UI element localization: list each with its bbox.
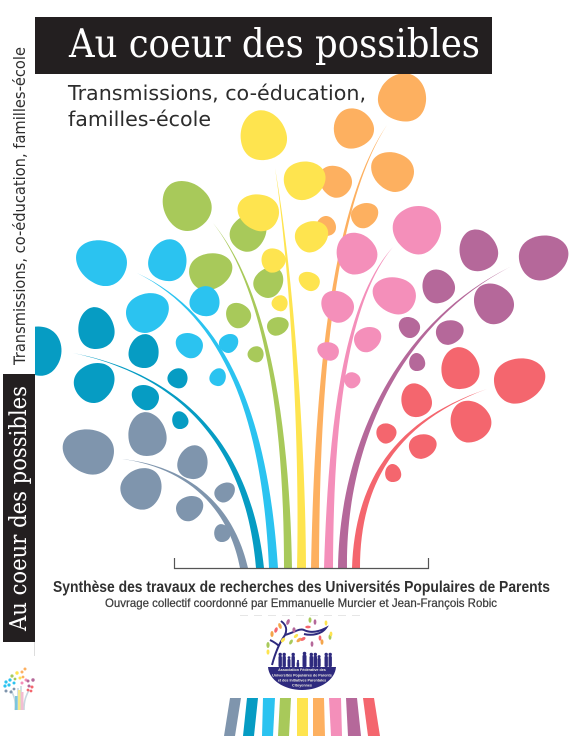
stem: pink <box>324 247 393 568</box>
logo: association <box>266 617 336 690</box>
logo semicircle: Association Fédérative des <box>278 668 326 672</box>
subtitle <box>67 81 366 131</box>
stem: red <box>352 389 487 568</box>
stem: purple <box>338 266 512 568</box>
leaves: grey <box>56 409 239 544</box>
logo tree <box>270 621 326 665</box>
bracket under stems <box>174 558 428 568</box>
leaves: yellow <box>232 105 334 314</box>
spine title: Au coeur des possibles <box>4 386 32 632</box>
leaves: light blue <box>68 231 242 389</box>
stem: yellow <box>275 168 306 568</box>
logo semicircle: Citoyennes <box>292 684 312 688</box>
logo leaves <box>266 617 332 655</box>
colour bars <box>224 698 380 736</box>
icon: small spine tree <box>3 668 35 710</box>
spine edge line <box>34 642 36 656</box>
stem: green <box>213 223 292 568</box>
subtitle: Transmissions, co-éducation, <box>67 81 366 105</box>
title banner: Au coeur des possibles <box>68 22 480 67</box>
logo silhouettes <box>278 652 332 667</box>
stem: grey <box>122 459 248 568</box>
leaves: purple <box>394 224 570 372</box>
faint dashes <box>240 614 365 616</box>
leaves: orange <box>312 66 434 236</box>
stem: orange <box>311 125 387 568</box>
leaves: pink <box>314 195 452 391</box>
text: coordinators: Ouvrage collectif coordonné par Emmanuelle Murcier et Jean-François Robic <box>105 596 497 610</box>
logo semicircle: Universités Populaires de Parents <box>272 674 332 678</box>
logo semicircle <box>268 667 336 690</box>
spine subtitle: Transmissions, co-éducation, familles-école <box>10 47 29 366</box>
title banner <box>35 17 492 74</box>
subtitle: familles-école <box>68 107 211 131</box>
leaves: red <box>372 344 552 483</box>
stem: teal <box>73 353 264 568</box>
leaves: teal <box>3 304 192 431</box>
stem: light blue <box>137 273 278 568</box>
logo semicircle: et des Initiatives Parentales <box>278 678 326 682</box>
leaves: green <box>152 170 291 365</box>
spine background <box>0 0 35 374</box>
